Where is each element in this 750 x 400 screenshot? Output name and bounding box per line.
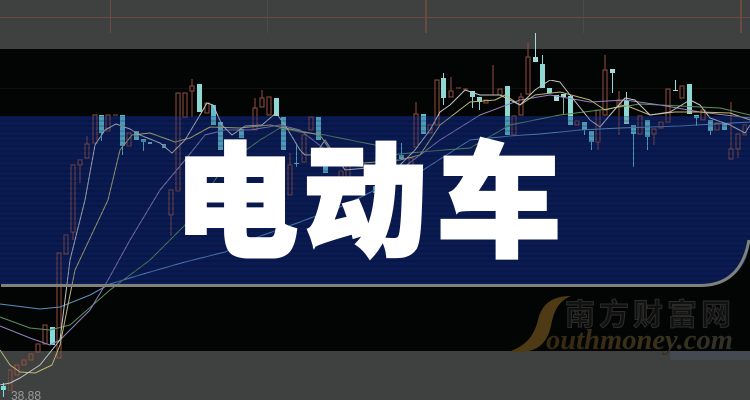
- bottom grey band: [0, 351, 750, 400]
- line: MA60 blue: [0, 122, 750, 309]
- line: MA20 purple: [0, 95, 750, 345]
- top grey band: [0, 0, 750, 49]
- moving average lines: [0, 80, 750, 385]
- title: 车: [437, 135, 561, 273]
- line: MA30 green: [0, 104, 750, 330]
- blue title panel: [0, 116, 750, 284]
- watermark chinese name: 南方财富网: [565, 299, 735, 332]
- title: 动: [303, 135, 427, 273]
- icon: watermark swoosh S: [508, 296, 571, 352]
- line: MA5 white: [0, 80, 750, 385]
- black chart background: [0, 49, 750, 351]
- watermark domain: outhmoney.com: [546, 325, 733, 356]
- watermark bottom blue strip: [670, 351, 750, 360]
- panel border: [1, 240, 749, 286]
- title: 电: [174, 135, 298, 273]
- line: MA10 yellow: [0, 92, 750, 373]
- watermark: southmoney: [508, 296, 735, 356]
- panel tint and scanlines: [0, 116, 750, 284]
- crosshair grid lines: [0, 0, 750, 88]
